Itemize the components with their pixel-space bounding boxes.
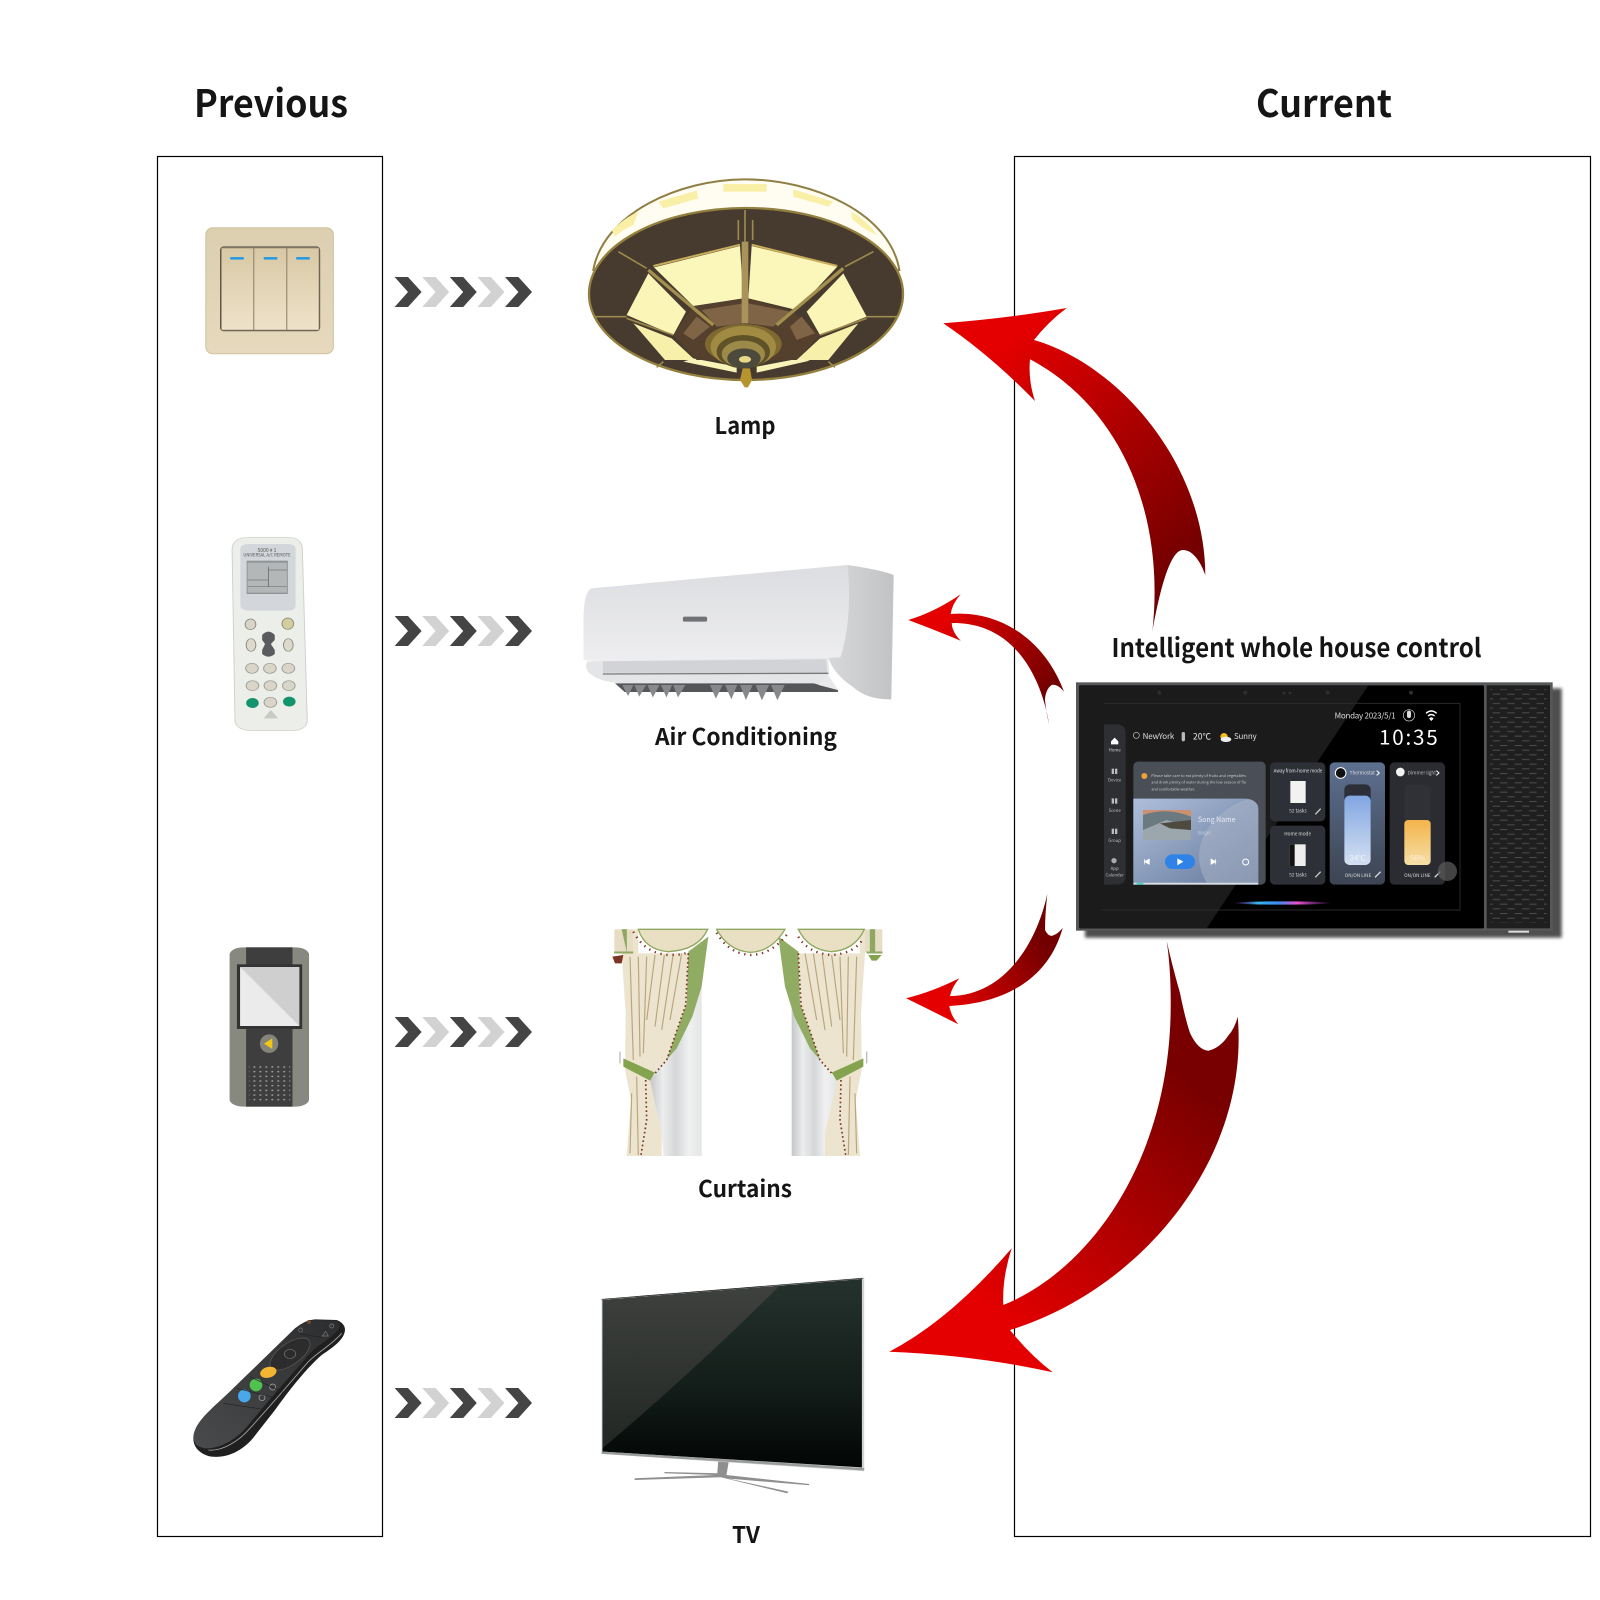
weather row: Sunny [1234,731,1257,742]
card: thermostat: 34℃ [1350,852,1366,863]
heading: Previous: Previous [194,73,348,128]
card: media player: Song Name [1198,815,1236,825]
card: dimmer light [1390,762,1457,885]
status: date: Monday 2023/5/1 [1335,710,1396,721]
arrow: panel to air conditioning [908,594,1064,725]
card: dimmer light: Dimmer light [1408,770,1436,777]
sidebar menu: Scene [1109,808,1121,814]
icon: microphone [1403,710,1415,721]
sidebar menu: App [1111,866,1119,872]
label: Intelligent whole house control: Intelligent whole house control [1112,628,1482,665]
card: dimmer light: 56% [1410,852,1425,863]
card: away from home mode [1270,762,1325,821]
drape: right [778,937,865,1156]
card: thermostat: ON/ON LINE [1345,873,1371,879]
voice assistant wave [1233,901,1333,905]
arrows: row 3 chevrons [395,1017,532,1047]
arrows: row 2 chevrons [395,616,532,646]
valance [612,929,882,1063]
icon: wifi [1426,711,1437,720]
icon: TV remote [193,1319,345,1457]
arrow: panel to TV [889,941,1239,1372]
card: thermostat [1330,762,1385,885]
icon: air conditioner [584,565,894,700]
card: home mode [1270,826,1325,885]
sheer: right [792,1007,837,1156]
icon: television [602,1277,864,1493]
card: media player: and drink plenty of water during the low season of flu [1151,781,1246,786]
icon: ceiling lamp [589,179,903,387]
device: wall control panel [1076,682,1562,938]
icon: AC remote [232,537,307,731]
sidebar menu: Calender [1106,871,1124,878]
panel shadow [1085,688,1562,938]
card: away from home mode: 52 tasks [1289,808,1307,815]
card: thermostat: Thermostat [1350,770,1375,777]
card: media player: and comfortable weather. [1151,787,1195,792]
heading: Current: Current [1256,73,1392,128]
sidebar menu: Device [1108,776,1122,783]
clock: 10:35 [1379,721,1438,751]
sidebar menu [1104,724,1126,885]
sidebar menu: Home [1109,747,1121,753]
card: media player: Singer [1197,829,1211,836]
sheer: left [650,987,702,1156]
weather row: 20℃ [1193,731,1211,743]
drape: left [622,937,708,1156]
card: away from home mode: Away from-home mode [1274,767,1323,774]
label: Lamp: Lamp [714,407,776,441]
arrow: panel to lamp [943,308,1205,632]
card: home mode: Home mode [1284,830,1311,837]
arrows: row 4 chevrons [395,1388,532,1418]
label: Air Conditioning: Air Conditioning [654,718,837,752]
icon: wall switch [206,228,333,354]
arrow: panel to curtains [906,894,1063,1024]
card: media player: Please take care to eat plenty of fruits and vegetables [1151,774,1246,779]
icon: AC remote: UNIVERSAL A/C REMOTE [243,552,291,558]
weather row: NewYork [1143,731,1175,742]
label: TV: TV [732,1516,761,1550]
icon: curtains [612,929,882,1156]
icon: AC remote: 5000 # 1 [258,547,277,554]
icon: handheld remote [230,947,309,1107]
card: media player [1133,762,1266,885]
panel: current [1014,156,1590,1536]
card: home mode: 52 tasks [1289,871,1307,878]
card: dimmer light: ON/ON LINE [1404,873,1431,879]
sidebar menu: Group [1108,838,1121,844]
weather row [1133,731,1257,743]
arrows: row 1 chevrons [395,277,532,307]
label: Curtains: Curtains [698,1170,792,1204]
panel: previous [158,156,382,1536]
